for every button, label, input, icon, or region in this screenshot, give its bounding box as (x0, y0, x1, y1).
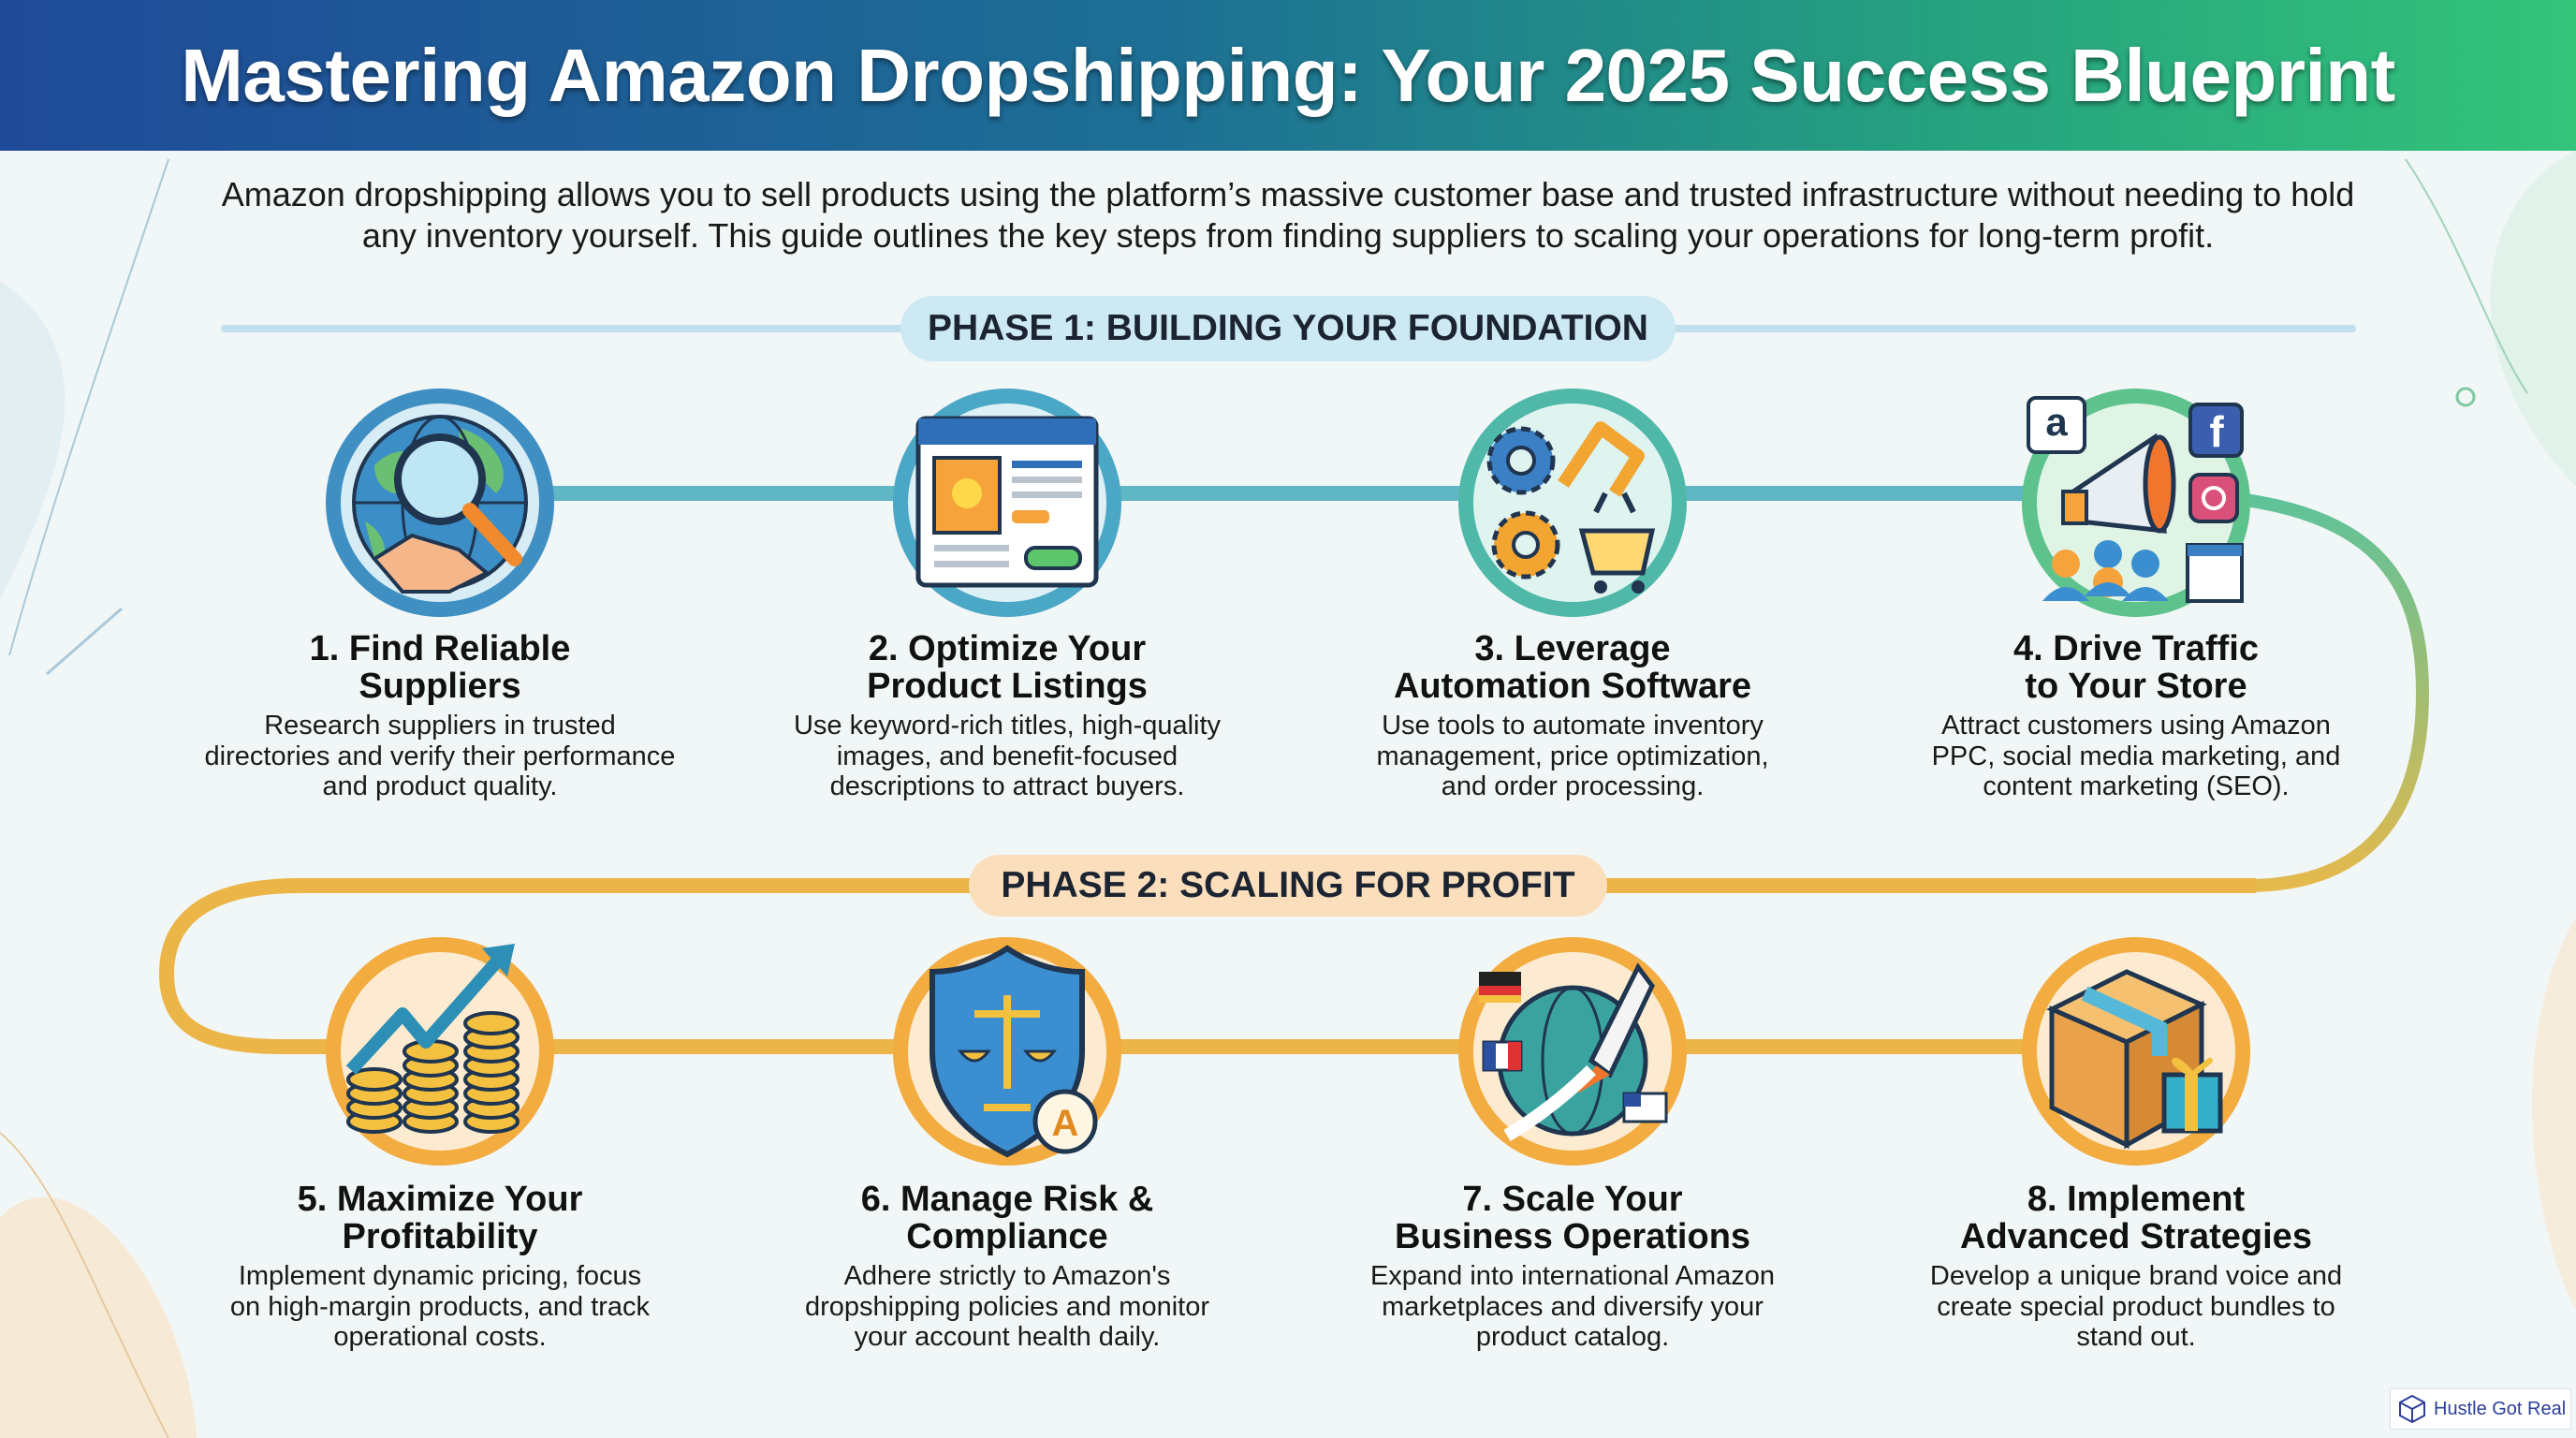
step 4 text (1932, 629, 2340, 801)
step 3 text: 3. Leverage (1474, 629, 1671, 668)
step 2 text: Use keyword-rich titles, high-quality (794, 711, 1221, 741)
step 6 text: 6. Manage Risk & (861, 1180, 1153, 1219)
step 6 text: your account health daily. (855, 1322, 1160, 1352)
step 4 text: PPC, social media marketing, and (1932, 741, 2340, 771)
step 2 text: descriptions to attract buyers. (830, 771, 1184, 801)
step 8 text: 8. Implement (2027, 1180, 2245, 1219)
step 8 text (1930, 1180, 2342, 1352)
step 5 icon: coins and growth arrow (326, 937, 554, 1166)
step 1 text: 1. Find Reliable (310, 629, 570, 668)
step 5 text: 5. Maximize Your (298, 1180, 582, 1219)
step 2 text: Product Listings (867, 667, 1148, 706)
step 6 text (805, 1180, 1209, 1352)
step 1 text: Research suppliers in trusted (264, 711, 616, 741)
step 5 text (230, 1180, 650, 1352)
step 4 text: content marketing (SEO). (1983, 771, 2290, 801)
title banner (0, 0, 2576, 151)
step 2 text (794, 629, 1221, 801)
watermark (2390, 1388, 2571, 1430)
step 7 text: Business Operations (1395, 1217, 1750, 1256)
step 7 text: marketplaces and diversify your (1382, 1292, 1764, 1322)
step 5 text: Profitability (342, 1217, 538, 1256)
connector row 1 (440, 493, 2422, 886)
phase 1 divider line (225, 325, 2352, 332)
step 7 icon: globe, rocket, flags (1458, 937, 1687, 1166)
step 1 text: and product quality. (323, 771, 557, 801)
intro text: Amazon dropshipping allows you to sell products using the platform’s massive customer base and trusted infrastructure without needing to hold (222, 175, 2354, 213)
step 4 text: 4. Drive Traffic (2013, 629, 2259, 668)
step 4 icon: megaphone and social media: f (2209, 407, 2224, 456)
step 3 text: and order processing. (1442, 771, 1704, 801)
step 1 icon: globe with magnifier and handshake (326, 389, 554, 617)
step 7 text: product catalog. (1476, 1322, 1669, 1352)
step 8 text: create special product bundles to (1937, 1292, 2335, 1322)
step 5 text: operational costs. (333, 1322, 547, 1352)
step 7 text: Expand into international Amazon (1370, 1261, 1775, 1291)
intro text: any inventory yourself. This guide outlines the key steps from finding suppliers to scaling your operations for long-term profit. (362, 216, 2214, 255)
watermark: Hustle Got Real (2434, 1399, 2566, 1419)
step 3 text (1376, 629, 1769, 801)
step 3 icon: gears, robot arm, cart (1458, 389, 1687, 617)
step 2 icon: product listing browser (893, 389, 1121, 617)
step 6 text: Adhere strictly to Amazon's (844, 1261, 1170, 1291)
step 4 text: to Your Store (2025, 667, 2247, 706)
step 2 text: 2. Optimize Your (869, 629, 1146, 668)
step 8 icon: box and gift (2022, 937, 2250, 1166)
step 6 icon: shield with scales: A (1052, 1103, 1078, 1144)
step 3 text: Automation Software (1394, 667, 1751, 706)
phase 1 label (900, 296, 1676, 361)
step 1 text: directories and verify their performance (205, 741, 675, 771)
step 6 icon: shield with scales (893, 937, 1121, 1166)
step 7 text (1370, 1180, 1775, 1352)
intro text (221, 175, 2354, 255)
phase 2 label: PHASE 2: SCALING FOR PROFIT (1001, 865, 1575, 905)
step 1 text: Suppliers (359, 667, 521, 706)
title banner: Mastering Amazon Dropshipping: Your 2025 Success Blueprint (181, 34, 2395, 116)
step 4 icon: megaphone and social media: a (2045, 400, 2068, 444)
step 4 icon: megaphone and social media (2022, 389, 2250, 617)
step 2 text: images, and benefit-focused (837, 741, 1178, 771)
phase 1 label: PHASE 1: BUILDING YOUR FOUNDATION (928, 308, 1648, 348)
step 3 text: management, price optimization, (1376, 741, 1769, 771)
step 4 text: Attract customers using Amazon (1941, 711, 2331, 741)
step 6 text: dropshipping policies and monitor (805, 1292, 1209, 1322)
connector row 2 (167, 886, 2256, 1047)
step 8 text: Advanced Strategies (1960, 1217, 2312, 1256)
step 3 text: Use tools to automate inventory (1382, 711, 1764, 741)
step 5 text: on high-margin products, and track (230, 1292, 650, 1322)
step 5 text: Implement dynamic pricing, focus (239, 1261, 641, 1291)
phase 2 label (969, 855, 1607, 917)
step 1 text (205, 629, 675, 801)
step 6 text: Compliance (906, 1217, 1108, 1256)
step 8 text: Develop a unique brand voice and (1930, 1261, 2342, 1291)
step 7 text: 7. Scale Your (1462, 1180, 1683, 1219)
step 8 text: stand out. (2076, 1322, 2196, 1352)
